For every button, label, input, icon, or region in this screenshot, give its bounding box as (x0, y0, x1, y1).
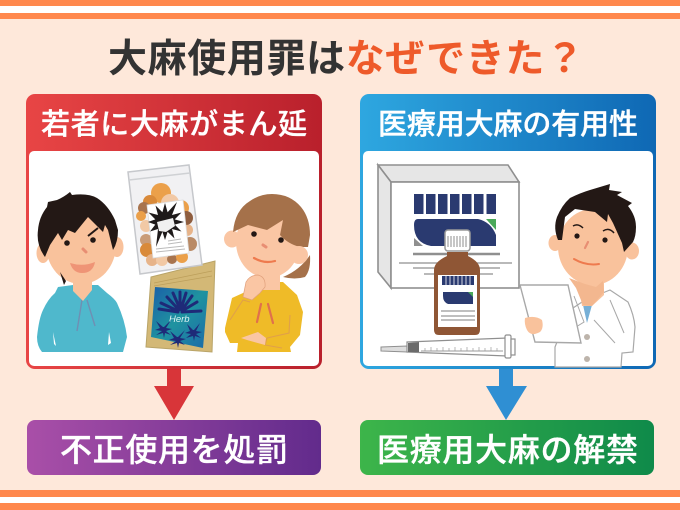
panel heading: young people: 若者に大麻がまん延 (41, 108, 307, 141)
illustration: medicine bottle (434, 230, 480, 335)
illustration: girl in yellow hoodie (224, 194, 310, 352)
arrow: right (486, 369, 527, 420)
illustration: bag of synthetic herbs (128, 165, 202, 274)
illustration: herb package (146, 261, 215, 352)
box: punish illegal use (27, 420, 321, 475)
box: lifting ban on medical cannabis: 医療用大麻の解禁 (377, 432, 638, 468)
box: punish illegal use: 不正使用を処罰 (60, 432, 288, 468)
title: 大麻使用罪はなぜできた？ (108, 38, 584, 81)
panel heading: medical cannabis: 医療用大麻の有用性 (378, 108, 638, 141)
illustration: doctor with clipboard (520, 184, 639, 367)
arrow: left (154, 369, 194, 420)
illustration: medicine box (378, 165, 519, 288)
illustration: syringe (381, 335, 515, 358)
panel: young people spreading cannabis use (26, 94, 322, 369)
panel: usefulness of medical cannabis (360, 94, 656, 369)
box: lifting ban on medical cannabis (360, 420, 654, 475)
illustration: boy in blue hoodie (36, 192, 127, 352)
herb label: Herb (169, 314, 190, 325)
